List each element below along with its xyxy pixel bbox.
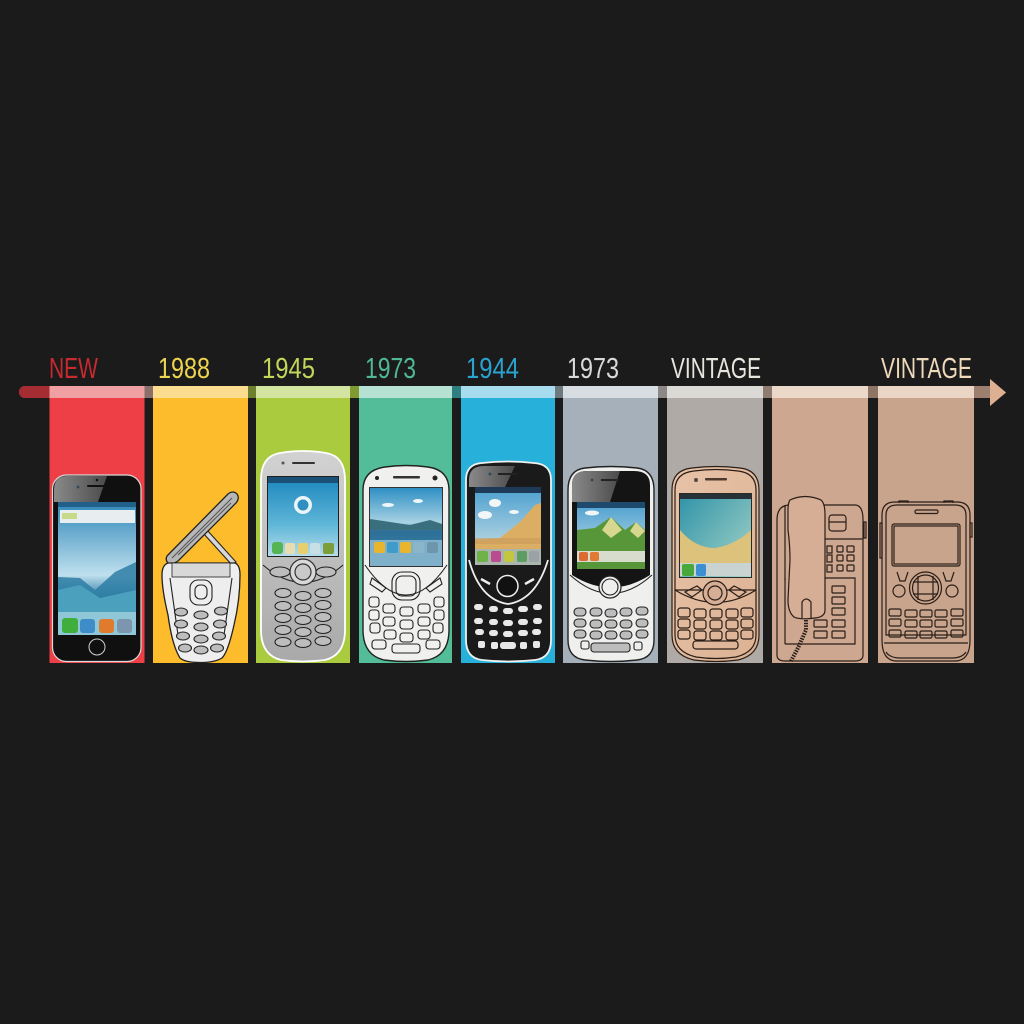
icon: corded desk telephone outline [777, 496, 866, 661]
label: NEW: NEW [49, 353, 98, 385]
icon: vintage outline phone [880, 501, 972, 661]
icon: silver candybar phone [261, 451, 345, 662]
icon: smartphone [52, 475, 141, 662]
label: 1945: 1945 [262, 353, 315, 385]
label: 1973 teal: 1973 [365, 353, 416, 385]
panel: red, modern smartphone [50, 386, 144, 663]
label: VINTAGE right: VINTAGE [881, 353, 972, 385]
icon: rose gold phone with beach screen [672, 466, 759, 662]
panel: blue, black phone [461, 386, 555, 663]
panel: green, silver phone [256, 386, 350, 663]
panel: yellow, flip phone [153, 386, 248, 663]
icon: black phone with desert screen [466, 462, 551, 662]
label: 1973 grey: 1973 [567, 353, 619, 385]
panel: warm grey, rose phone [667, 386, 763, 663]
icon: white phone with lake screen [363, 466, 449, 662]
icon: flip phone [162, 492, 240, 662]
panel: tan, desk telephone [772, 386, 868, 663]
panel: teal, white phone [359, 386, 452, 663]
panel: grey, white phone with dark top [563, 386, 658, 663]
label: 1944: 1944 [466, 353, 519, 385]
icon: phone with green hills screen [568, 466, 654, 662]
year labels [49, 353, 972, 385]
panel: tan, outline handset [878, 386, 974, 663]
label: VINTAGE: VINTAGE [671, 353, 761, 385]
timeline arrow [19, 379, 1006, 406]
label: 1988: 1988 [158, 353, 210, 385]
